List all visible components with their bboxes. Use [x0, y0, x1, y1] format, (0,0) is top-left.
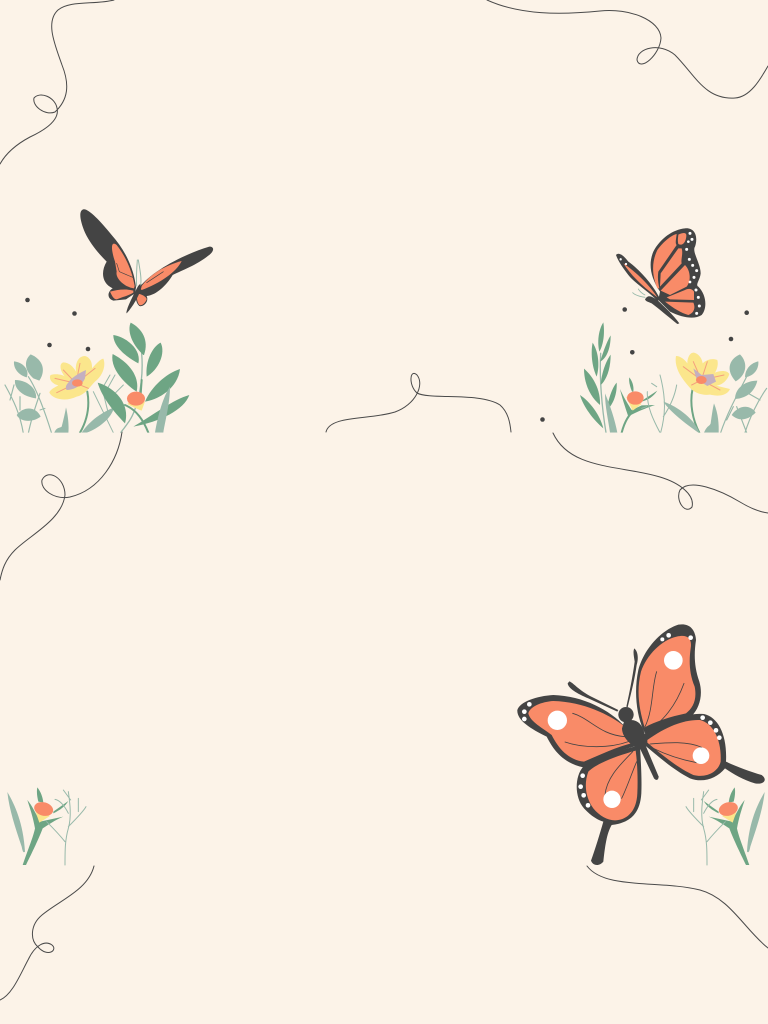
upper left wing: [517, 695, 640, 767]
upper right wing: [636, 624, 701, 737]
plant: bottom right bud: [686, 787, 765, 865]
lower left wing: [577, 746, 642, 865]
small orange bud: [620, 377, 657, 433]
curl: middle right: [553, 433, 768, 513]
curl: top right: [487, 0, 768, 98]
butterfly: large, lower right: [517, 624, 765, 865]
green sprig: [98, 323, 189, 433]
grey herb: [704, 354, 767, 433]
yellow flower: [49, 356, 114, 433]
wispy stems: [642, 375, 677, 433]
curl: top left: [0, 0, 114, 164]
curl: bottom right: [587, 866, 768, 948]
body and antennae: [568, 648, 659, 780]
curl: middle left: [0, 432, 122, 580]
yellow flower: [663, 353, 730, 433]
lower right wing: [643, 714, 765, 784]
plant: bottom left bud: [7, 787, 86, 865]
grey herb: [5, 354, 123, 433]
butterfly: upper right, monarch side view: [616, 228, 705, 324]
dots: scattered: [25, 298, 749, 422]
plant: right cluster with yellow flower: [580, 322, 767, 433]
plant: left cluster with yellow flower: [5, 323, 189, 433]
green sprig: [580, 322, 617, 433]
curl: bottom left: [0, 866, 94, 1000]
butterfly: upper left, side view: [80, 209, 213, 313]
curl: centre: [326, 373, 511, 432]
